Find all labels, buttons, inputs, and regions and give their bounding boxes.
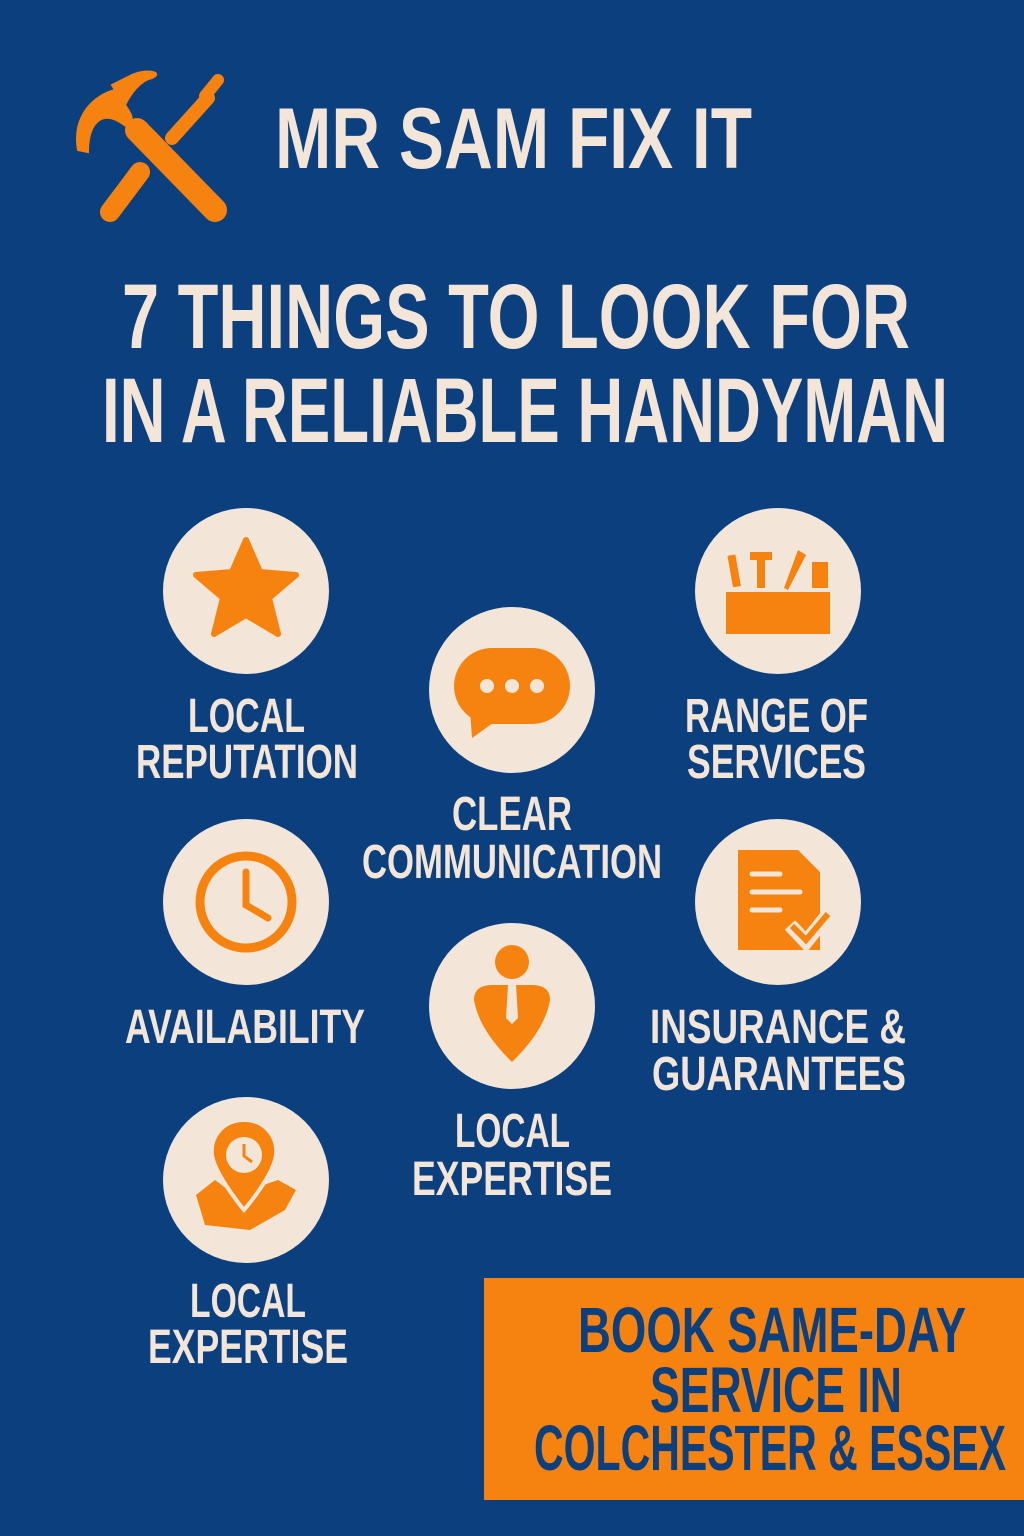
item: local expertise (person): EXPERTISE	[412, 1153, 612, 1206]
item: range of services: RANGE OF	[685, 690, 868, 743]
icon: person with tie	[474, 945, 550, 1062]
item: range of services	[685, 508, 868, 789]
item: insurance & guarantees	[650, 819, 906, 1101]
title: brand: MR SAM FIX IT	[275, 91, 752, 187]
icon: toolbox	[726, 550, 830, 634]
icon: star	[196, 540, 296, 634]
item: insurance & guarantees: GUARANTEES	[652, 1048, 906, 1101]
item: local expertise (person)	[412, 923, 612, 1206]
icon: speech bubble	[454, 648, 570, 738]
item: clear communication	[362, 607, 662, 889]
icon: map pin	[196, 1180, 296, 1230]
item: range of services: SERVICES	[687, 736, 866, 789]
item: clear communication: CLEAR	[452, 788, 572, 841]
item: local expertise (map pin): EXPERTISE	[148, 1321, 348, 1374]
item: local expertise (map pin): LOCAL	[190, 1275, 306, 1328]
item: availability: AVAILABILITY	[125, 1001, 365, 1054]
item: insurance & guarantees: INSURANCE &	[650, 1001, 906, 1054]
item: availability	[125, 819, 365, 1054]
heading	[102, 266, 948, 462]
item: local reputation	[136, 508, 358, 789]
logo: hammer and screwdriver	[77, 72, 218, 212]
call to action box: SERVICE IN	[650, 1354, 902, 1426]
item: local reputation: LOCAL	[188, 690, 305, 743]
call to action box	[484, 1278, 1024, 1500]
item: local expertise (person): LOCAL	[455, 1105, 570, 1158]
item: local reputation: REPUTATION	[136, 736, 358, 789]
icon: document with check	[738, 850, 820, 950]
icon: clock	[200, 856, 292, 948]
item: local expertise (map pin)	[148, 1097, 348, 1374]
item: clear communication: COMMUNICATION	[362, 836, 662, 889]
